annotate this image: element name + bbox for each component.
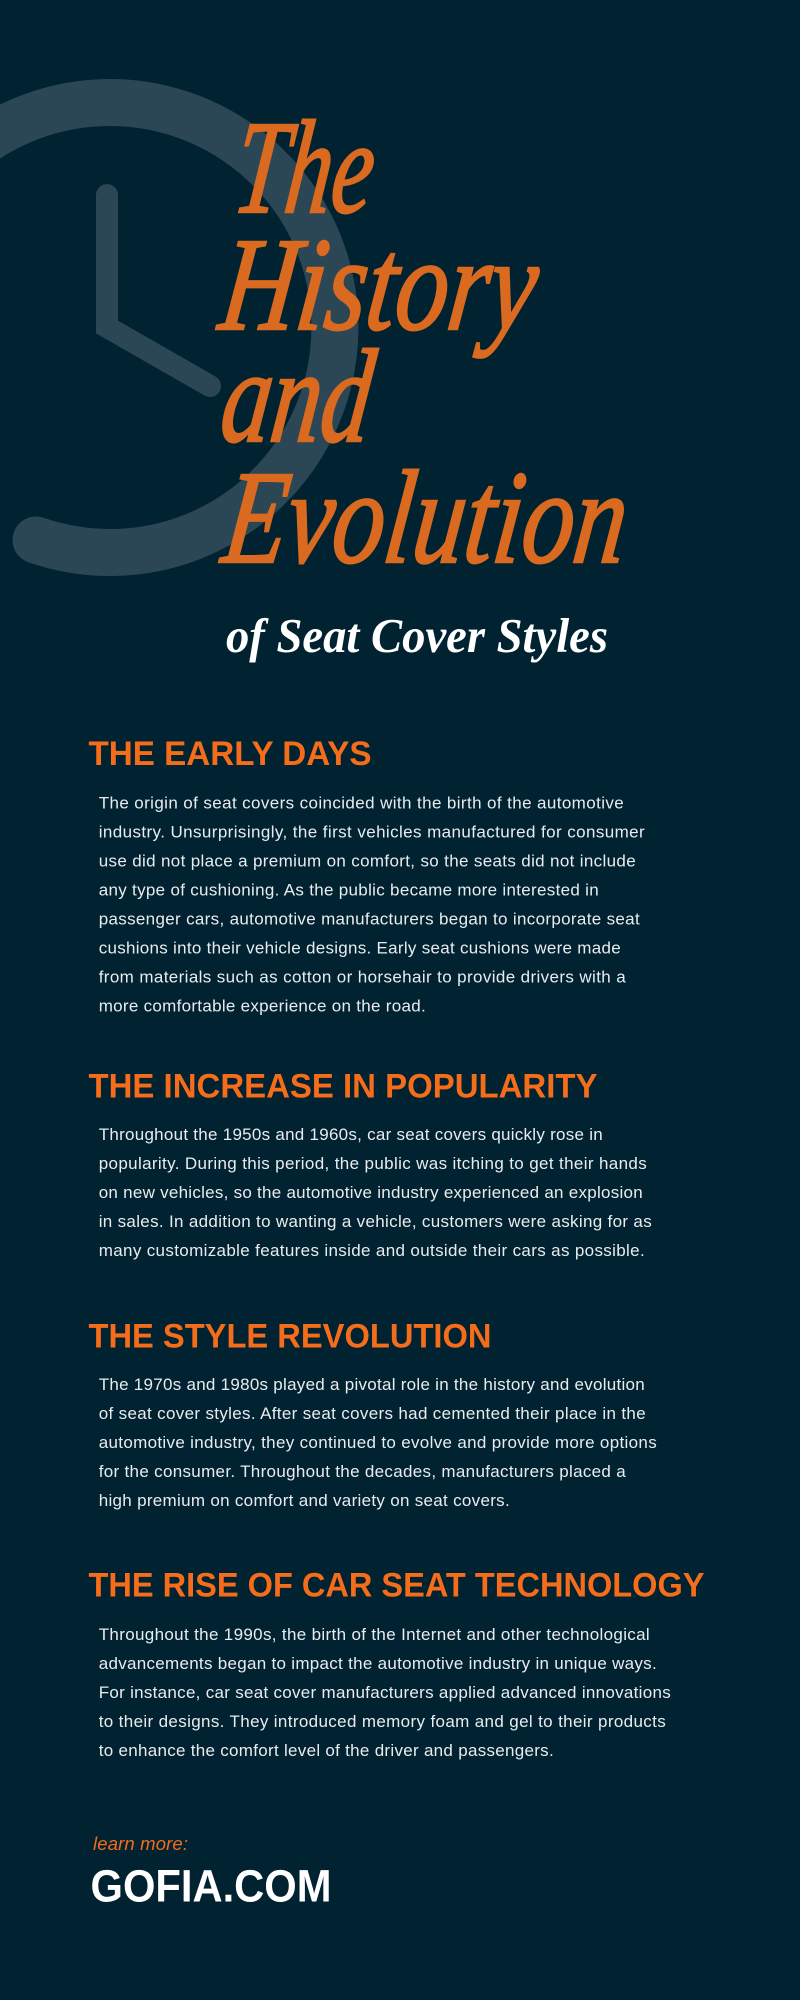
heading: the style revolution: THE STYLE REVOLUTION xyxy=(88,1318,492,1356)
website address: GOFIA.COM xyxy=(90,1861,332,1912)
panel: the style revolution xyxy=(88,1318,657,1510)
body text: the increase in popularity xyxy=(99,1125,652,1260)
body text: the early days: passenger cars, automotive manufacturers began to incorporate seat xyxy=(99,909,640,928)
panel: the early days xyxy=(88,735,645,1015)
heading: the early days: THE EARLY DAYS xyxy=(88,735,372,773)
heading: the rise of car seat technology: THE RISE OF CAR SEAT TECHNOLOGY xyxy=(88,1567,704,1605)
body text: the early days: use did not place a premium on comfort, so the seats did not include xyxy=(99,851,636,870)
body text: the increase in popularity: Throughout the 1950s and 1960s, car seat covers quickly rose in xyxy=(99,1125,603,1144)
body text: the style revolution: of seat cover styles. After seat covers had cemented their place in the xyxy=(99,1404,646,1423)
body text: the early days xyxy=(99,793,645,1015)
footer call to action xyxy=(90,1833,332,1912)
body text: the increase in popularity: many customizable features inside and outside their cars as possible. xyxy=(99,1241,645,1260)
body text: the increase in popularity: on new vehicles, so the automotive industry experienced an explosion xyxy=(99,1183,643,1202)
body text: the style revolution: automotive industry, they continued to evolve and provide more options xyxy=(99,1433,657,1452)
body text: the style revolution: high premium on comfort and variety on seat covers. xyxy=(99,1491,510,1510)
body text: the early days: more comfortable experience on the road. xyxy=(99,996,426,1015)
panel: the rise of car seat technology xyxy=(88,1567,704,1760)
subtitle: of Seat Cover Styles xyxy=(226,608,608,663)
body text: the style revolution xyxy=(99,1375,657,1510)
icon: clock xyxy=(0,102,335,552)
title line: and: and xyxy=(214,322,382,470)
body text: the early days: any type of cushioning. As the public became more interested in xyxy=(99,880,599,899)
heading: the increase in popularity: THE INCREASE IN POPULARITY xyxy=(88,1068,598,1106)
body text: the rise of car seat technology: to enhance the comfort level of the driver and passengers. xyxy=(99,1741,554,1760)
clock hands xyxy=(107,195,210,386)
body text: the style revolution: The 1970s and 1980s played a pivotal role in the history and evolution xyxy=(99,1375,645,1394)
title line: Evolution: Evolution xyxy=(215,443,637,591)
title xyxy=(212,93,637,591)
clock ring xyxy=(0,102,335,552)
body text: the rise of car seat technology xyxy=(99,1625,671,1760)
body text: the early days: cushions into their vehicle designs. Early seat cushions were made xyxy=(99,938,621,957)
body text: the early days: from materials such as cotton or horsehair to provide drivers with a xyxy=(99,967,626,986)
title line: History: History xyxy=(212,210,547,358)
body text: the rise of car seat technology: advancements began to impact the automotive industry in unique ways. xyxy=(99,1654,657,1673)
body text: the increase in popularity: popularity. During this period, the public was itching to get their hands xyxy=(99,1154,647,1173)
body text: the rise of car seat technology: Throughout the 1990s, the birth of the Internet and other technological xyxy=(99,1625,650,1644)
panel: the increase in popularity xyxy=(88,1068,652,1260)
body text: the early days: The origin of seat covers coincided with the birth of the automotive xyxy=(99,793,624,812)
body text: the early days: industry. Unsurprisingly, the first vehicles manufactured for consumer xyxy=(99,822,645,841)
body text: the rise of car seat technology: to their designs. They introduced memory foam and gel to their products xyxy=(99,1712,666,1731)
learn more label: learn more: xyxy=(93,1833,188,1854)
body text: the increase in popularity: in sales. In addition to wanting a vehicle, customers were asking for as xyxy=(99,1212,652,1231)
body text: the style revolution: for the consumer. Throughout the decades, manufacturers placed a xyxy=(99,1462,626,1481)
body text: the rise of car seat technology: For instance, car seat cover manufacturers applied advanced innovations xyxy=(99,1683,671,1702)
title line: The: The xyxy=(227,93,384,241)
